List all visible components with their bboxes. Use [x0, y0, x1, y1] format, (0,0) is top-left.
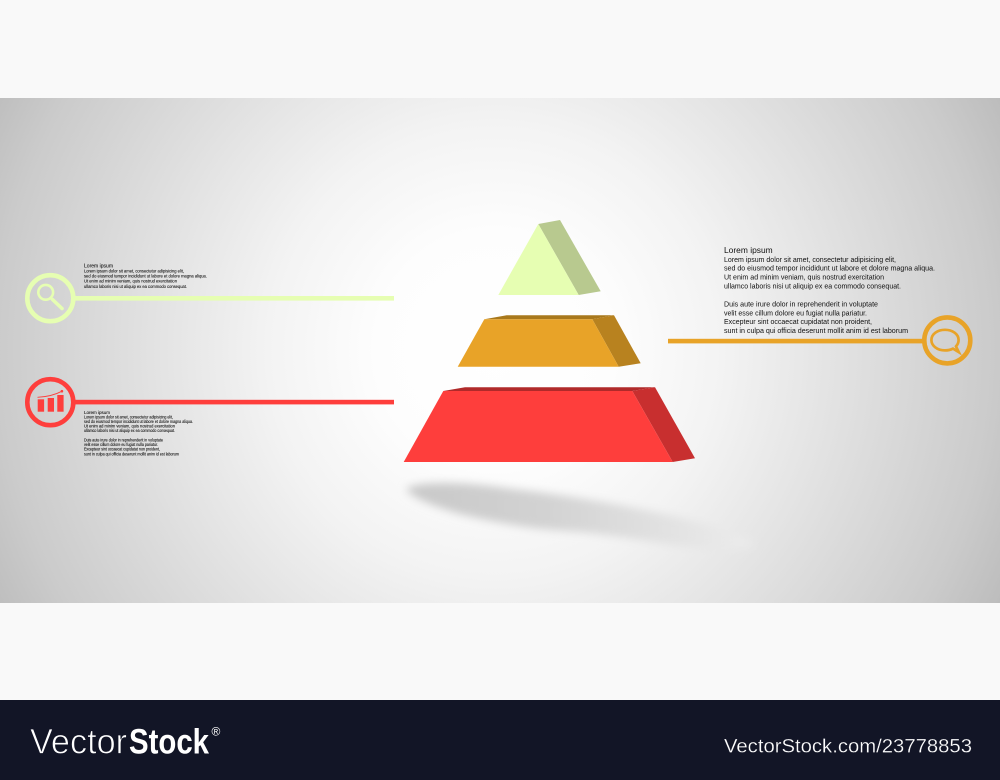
text block: lower left: Lorem ipsum: [84, 410, 110, 416]
text block: right: Excepteur sint occaecat cupidatat non proident,: [724, 317, 872, 326]
text block: lower left: velit esse cillum dolore eu fugiat nulla pariatur.: [84, 442, 158, 447]
text block: upper left: [84, 264, 207, 289]
lower white band: [0, 603, 1000, 700]
text block: right: Lorem ipsum dolor sit amet, consectetur adipisicing elit,: [724, 255, 896, 264]
pyramid top tier: [498, 220, 601, 295]
text block: lower left: Lorem ipsum dolor sit amet, consectetur adipisicing elit,: [84, 414, 173, 420]
top white band: [0, 0, 1000, 98]
text block: right: velit esse cillum dolore eu fugiat nulla pariatur.: [724, 308, 867, 317]
text block: upper left: sed do eiusmod tempor incididunt ut labore et dolore magna aliqua.: [84, 274, 207, 279]
text block: right: Lorem ipsum: [724, 245, 773, 255]
text block: lower left: sunt in culpa qui officia deserunt mollit anim id est laborum: [84, 452, 180, 456]
text block: lower left: Excepteur sint occaecat cupidatat non proident,: [84, 446, 160, 452]
text block: lower left: Ut enim ad minim veniam, quis nostrud exercitation: [84, 424, 176, 428]
footer bar: [0, 700, 1000, 780]
text block: lower left: [84, 410, 193, 456]
text block: upper left: Lorem ipsum: [84, 264, 113, 270]
text block: right: [724, 245, 935, 335]
text block: lower left: sed do eiusmod tempor incididunt ut labore et dolore magna aliqua.: [84, 419, 193, 424]
pyramid shadow: [406, 483, 755, 549]
pyramid chart: [404, 220, 695, 462]
text block: upper left: ullamco laboris nisi ut aliquip ex ea commodo consequat.: [84, 284, 187, 289]
footer id text: VectorStock.com/23778853: [724, 736, 972, 758]
footer logo: VectorStock: [30, 722, 209, 762]
text block: right: Ut enim ad minim veniam, quis nostrud exercitation: [724, 273, 884, 282]
text block: right: sunt in culpa qui officia deserunt mollit anim id est laborum: [724, 326, 908, 335]
text block: right: ullamco laboris nisi ut aliquip ex ea commodo consequat.: [724, 282, 901, 291]
text block: upper left: Lorem ipsum dolor sit amet, consectetur adipisicing elit,: [84, 268, 184, 274]
callout line: red: [74, 400, 394, 404]
text block: upper left: Ut enim ad minim veniam, quis nostrud exercitation: [84, 279, 177, 284]
footer registered mark: ®: [212, 724, 220, 738]
text block: right: Duis aute irure dolor in reprehenderit in voluptate: [724, 299, 878, 308]
text block: lower left: ullamco laboris nisi ut aliquip ex ea commodo consequat.: [84, 428, 175, 433]
callout line: green: [74, 296, 394, 301]
footer logo: VectorStock: Stock: [129, 722, 209, 762]
icon: speech bubble in orange ring: [924, 317, 970, 363]
pyramid bottom tier: [404, 387, 695, 462]
icon: bar chart in red ring: [27, 379, 73, 425]
footer logo: VectorStock: Vector: [30, 722, 127, 762]
icon: magnifier in green ring: [27, 275, 73, 321]
text block: right: sed do eiusmod tempor incididunt ut labore et dolore magna aliqua.: [724, 264, 935, 273]
text block: lower left: Duis aute irure dolor in reprehenderit in voluptate: [84, 438, 164, 442]
callout line: orange: [668, 339, 924, 343]
pyramid middle tier: [458, 315, 641, 367]
panel: gray gradient background: [0, 98, 1000, 603]
